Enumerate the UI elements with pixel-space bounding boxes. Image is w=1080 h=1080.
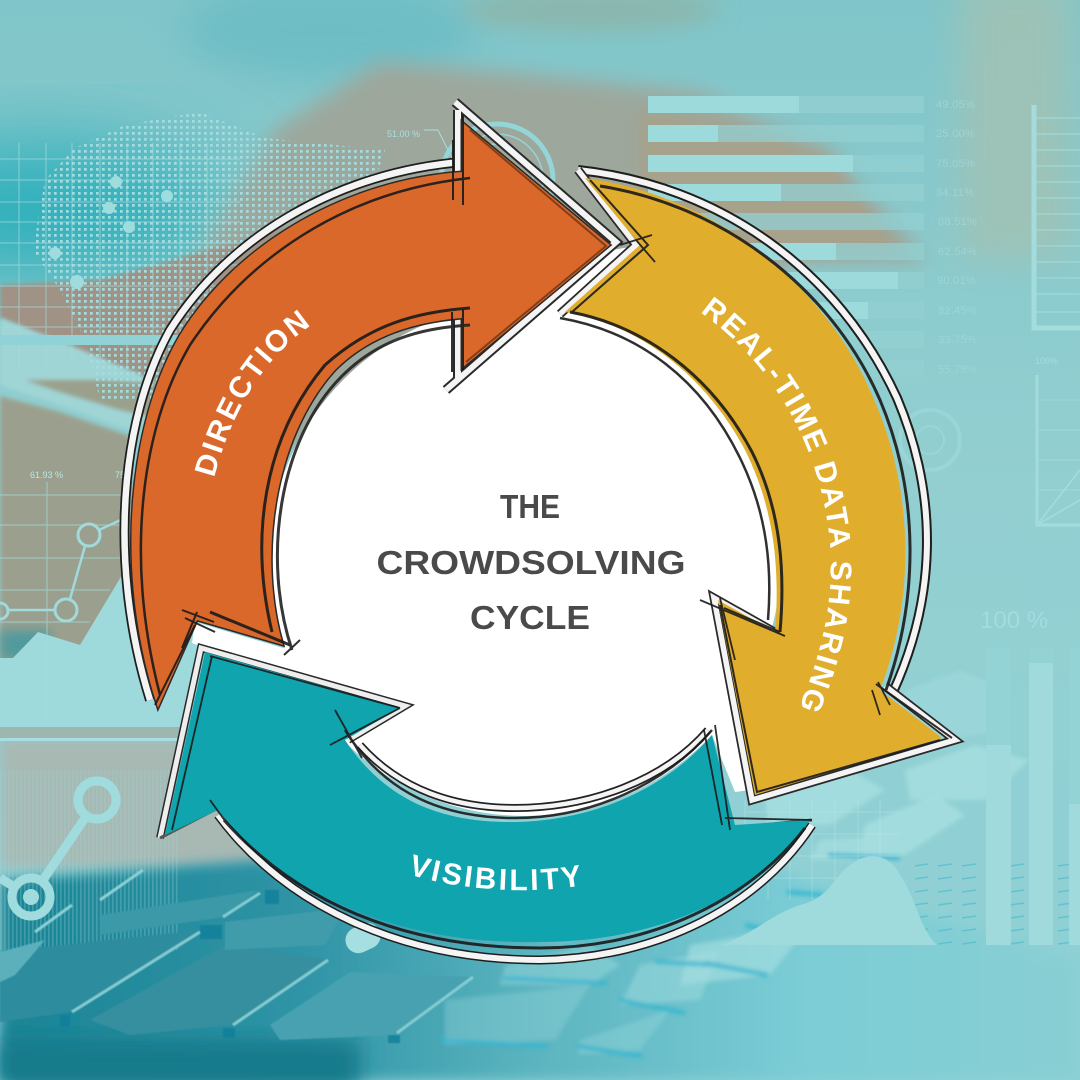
sketch lines [560, 180, 952, 792]
sage column upper right [960, 0, 1070, 260]
line chart widget left: 61.93 % [30, 470, 63, 480]
horizontal bar chart with percentages: 62.54% [938, 246, 977, 258]
center title: THE [500, 488, 560, 525]
teal glow top [180, 0, 480, 80]
arrow: real-time data sharing [557, 165, 965, 806]
ring gauge right [900, 410, 960, 470]
horizontal rule left [0, 335, 178, 345]
olive upper finger [25, 380, 190, 425]
line chart upper right [1034, 105, 1080, 328]
label: real-time data sharing: REAL-TIME DATA SHARING [702, 296, 852, 712]
line chart right middle [1035, 356, 1080, 525]
outer sketch band [124, 102, 616, 700]
horizontal bar chart with percentages: 90.01% [937, 275, 976, 287]
label: visibility: VISIBILITY [413, 854, 579, 890]
horizontal bar chart with percentages: 33.75% [938, 334, 977, 346]
keyboard base [0, 860, 1080, 1080]
lower left grey blob [0, 738, 300, 868]
grid lines over map [0, 143, 240, 367]
horizontal bar chart with percentages [648, 96, 977, 377]
pale finger band [0, 318, 175, 430]
vertical bar chart [986, 647, 1080, 945]
teal glow upper left [0, 140, 230, 280]
line chart widget left: 75. [115, 470, 128, 480]
hand brown, left of arrow [0, 190, 370, 420]
horizontal bar chart with percentages: 08.51% [938, 216, 977, 228]
horizontal bar chart with percentages: 25.00% [936, 128, 975, 140]
keyboard keys, lower left [0, 870, 473, 1043]
horizontal bar chart with percentages: 49.05% [936, 99, 975, 111]
label: direction: DIRECTION [194, 310, 310, 476]
center title [376, 488, 686, 636]
line chart widget left [0, 470, 130, 727]
center title: CYCLE [470, 599, 590, 636]
radial gauge behind arrow [441, 124, 553, 236]
line chart right middle: 100% [1035, 356, 1058, 366]
arrow: visibility [156, 643, 816, 964]
sketch lines [172, 656, 812, 948]
arrow: direction [119, 98, 624, 712]
grey band under area chart [0, 727, 190, 738]
small label 51.00% with leader [387, 129, 452, 158]
outer sketch band [160, 648, 812, 960]
halftone dashes [915, 860, 1080, 945]
area chart lower right [722, 856, 937, 945]
cycle diagram [119, 98, 965, 964]
white centre circle and gaps [192, 246, 781, 816]
keyboard keys, lower right [440, 670, 1030, 1056]
sketch lines [141, 115, 606, 705]
small pill behind teal arrow [341, 919, 385, 957]
center title: CROWDSOLVING [376, 544, 686, 581]
horizontal bar chart with percentages: 34.11% [936, 187, 974, 199]
small label 51.00% with leader: 51.00 % [387, 129, 420, 139]
area chart left [0, 570, 215, 727]
pale rule under area chart [0, 738, 185, 741]
100% label: 100 % [980, 607, 1048, 634]
warm tone between bars [640, 110, 900, 260]
sage streak top [460, 0, 720, 32]
outer sketch band [560, 170, 955, 800]
horizontal bar chart with percentages: 75.05% [936, 158, 975, 170]
teal shadow left bottom of thumb [0, 630, 50, 660]
dotted world map [33, 112, 385, 400]
blurred forearm, grey sage [180, 62, 925, 480]
map hotspots [49, 176, 173, 289]
dark strip bottom [0, 1040, 360, 1080]
connected nodes icon lower left [0, 781, 116, 916]
horizontal bar chart with percentages: 82.45% [938, 305, 977, 317]
chart grid over keys [745, 800, 900, 900]
olive thumb area [0, 396, 140, 665]
keyboard texture stripes [0, 770, 180, 950]
horizontal bar chart with percentages: 55.75% [938, 364, 977, 376]
